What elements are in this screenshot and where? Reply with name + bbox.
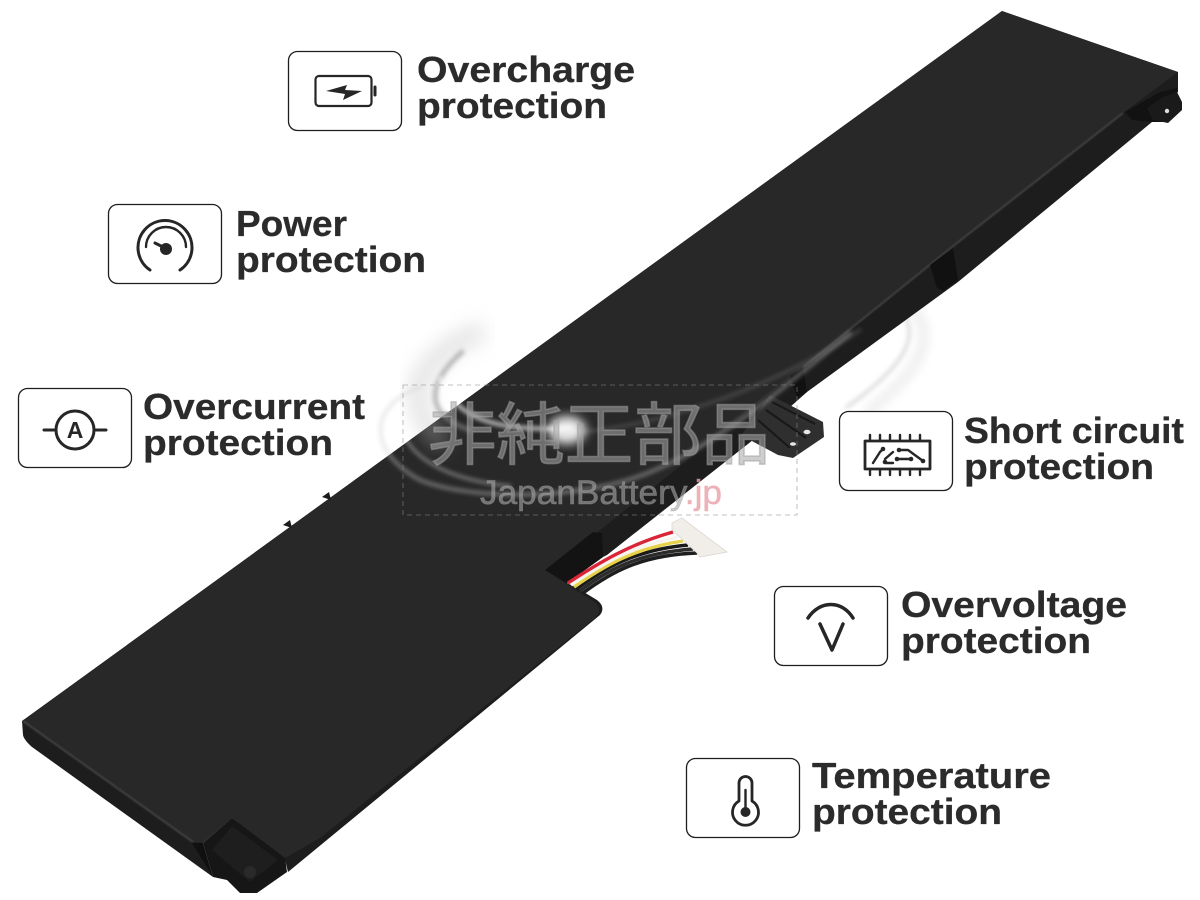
crease highlights xyxy=(23,113,1123,842)
label: protection xyxy=(417,85,607,126)
label: Overcurrent xyxy=(143,386,365,427)
side flap xyxy=(930,248,958,291)
wiring xyxy=(568,532,697,593)
label: protection xyxy=(964,446,1154,487)
label: protection xyxy=(812,791,1002,832)
right mounting tab xyxy=(1125,88,1182,123)
watermark text: JapanBattery.jp: JapanBattery.jp xyxy=(480,474,722,512)
label: Short circuit xyxy=(964,410,1184,451)
watermark dashed frame xyxy=(403,385,797,515)
feature: overvoltage protection xyxy=(774,584,1127,666)
label: protection xyxy=(143,422,333,463)
icon: thermometer xyxy=(733,776,759,825)
cable flap xyxy=(545,532,603,583)
label: protection xyxy=(236,239,426,280)
icon box xyxy=(18,388,132,468)
feature: temperature protection xyxy=(686,755,1051,838)
label: Temperature xyxy=(812,755,1051,796)
icon box xyxy=(840,412,952,490)
bottom corner connector xyxy=(192,818,287,893)
small side flap xyxy=(790,368,807,398)
icon: gauge xyxy=(138,221,192,270)
wire connector xyxy=(672,518,727,557)
icon box xyxy=(686,758,800,838)
swoosh behind on white xyxy=(847,300,924,410)
label: Overcharge xyxy=(417,49,635,90)
icon: voltmeter arc xyxy=(808,604,853,650)
feature: overcurrent protection xyxy=(18,386,365,468)
watermark text: 非純正部品: 非純正部品 xyxy=(428,398,770,474)
watermark swoosh xyxy=(381,330,860,495)
feature: power protection xyxy=(108,203,426,284)
icon box xyxy=(774,586,888,666)
label: Overvoltage xyxy=(901,584,1127,625)
left edge bumps xyxy=(283,492,331,528)
centre mounting tab xyxy=(738,395,824,458)
icon box xyxy=(108,204,222,284)
label: protection xyxy=(901,620,1091,661)
label: Power xyxy=(236,203,347,244)
feature: short circuit protection xyxy=(840,410,1184,490)
icon: ammeter: A xyxy=(67,417,83,443)
icon box xyxy=(288,52,402,130)
feature: overcharge protection xyxy=(288,49,635,130)
icon: battery with bolt xyxy=(316,76,375,106)
icon: circuit board xyxy=(865,435,930,475)
icon: ammeter xyxy=(44,411,106,449)
